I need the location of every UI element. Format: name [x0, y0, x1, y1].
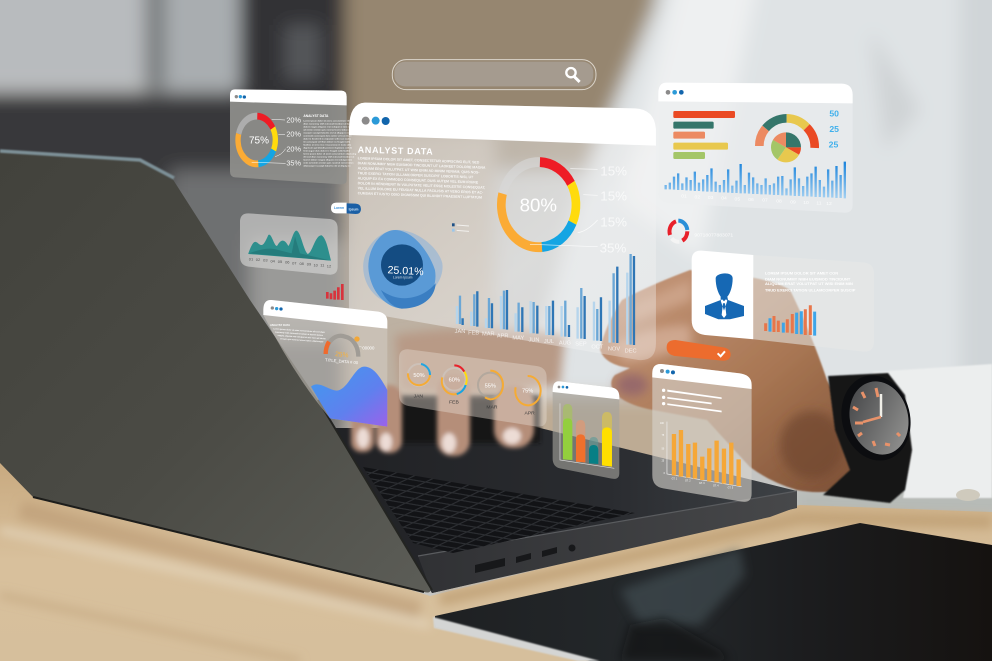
gauge apr: APR: [525, 410, 535, 416]
bar chart: 12: [826, 201, 832, 207]
heading: analyst data: ANALYST DATA: [358, 145, 434, 157]
text block: lorem ipsum: [358, 156, 486, 200]
bar chart: 08: [776, 199, 782, 205]
bar chart monthly: JUN: [528, 338, 539, 344]
panel header: [553, 381, 619, 399]
text block: diam nonummy nibh euismod tincidunt ut laoreet: [303, 122, 354, 125]
text block: ullamcorper suscipit lobortis nisl ut aliquip ex: [303, 164, 351, 167]
bar chart: 07: [762, 198, 768, 204]
axis labels: 09: [307, 262, 312, 267]
text block: lorem ipsum: ALIQUIP EX EA COMMODO CONSEQUAT. DUIS AUTEM VEL EUM IRIURE: [358, 176, 479, 185]
area chart: [248, 231, 331, 261]
text lines: ALIQUAM ERAT VOLUTPAT UT WISI ENIM MIN: [765, 281, 853, 286]
axis labels: 10: [313, 262, 319, 267]
legend: [452, 223, 469, 232]
text block: lorem ipsum: VEL ILLUM DOLORE EU FEUGIAT NULLA FACILISIS AT VERO EROS ET AC-: [358, 186, 484, 195]
panel header: [652, 364, 752, 389]
text block: Lorem ipsum dolor sit amet, consectetuer elit sed: [303, 119, 355, 122]
typing fingers: [351, 375, 534, 456]
bar chart: GT. 1: [672, 478, 678, 480]
gauge 25%: 00000: [362, 345, 375, 350]
blob chart 25.01%: 25.01%: [387, 264, 424, 278]
text block: enim ad minim veniam quis nostrud exerci tation: [303, 161, 354, 164]
gauge feb: 60%: [449, 378, 460, 384]
text block: Lorem ipsum dolor sit amet consectetuer elit sed diam: [273, 327, 325, 334]
bar chart: 02: [695, 194, 700, 200]
donut chart 75%: 35%: [286, 159, 301, 168]
bar chart: 10: [803, 200, 809, 206]
axis labels: 12: [327, 263, 332, 268]
pill bars: [560, 403, 614, 468]
panel: analyst data main: [349, 103, 656, 360]
text block: laoreet dolore magna aliquam erat volutpat wisi: [303, 158, 352, 161]
wristwatch: [823, 368, 919, 503]
icon: magnifier: [566, 68, 580, 82]
donut chart 80%: 80%: [520, 195, 557, 216]
bar chart: 09: [790, 199, 796, 205]
text block: lorem ipsum dolor sit amet consectetuer adipiscing: [303, 152, 357, 155]
gauge 25%: 25%: [335, 351, 349, 359]
gauge jan: 50%: [413, 373, 425, 379]
donut chart 75%: 75%: [249, 135, 269, 146]
axis labels: [249, 256, 332, 268]
bar chart: GT. 3: [699, 483, 705, 485]
axis labels: 03: [263, 258, 268, 263]
bar chart: 75: [662, 435, 665, 437]
donut chart 75%: 20%: [286, 115, 301, 124]
text block: [270, 323, 326, 343]
axis labels: 04: [270, 258, 276, 263]
bar chart: 03: [708, 195, 714, 201]
orange status button: [667, 340, 731, 361]
panel header: [658, 83, 853, 103]
text lines: [765, 270, 856, 292]
panel: orange bar chart: [652, 364, 752, 502]
text block: lorem ipsum: DIAM NONUMMY NIBH EUISMOD TINCIDUNT UT LAOREET DOLORE MAGNA: [358, 161, 486, 170]
axis labels: 01: [249, 256, 254, 261]
semicircle gauge: [759, 118, 815, 148]
axis labels: 02: [256, 257, 261, 262]
bar chart: 100: [660, 423, 665, 425]
bar chart monthly: OCT: [591, 344, 604, 350]
bar chart: GT. 5: [728, 488, 734, 490]
value labels: [829, 108, 839, 149]
gauge apr: 75%: [522, 389, 533, 395]
text block: ANALYST DATA: [303, 114, 329, 118]
mixed bar chart: [766, 305, 815, 336]
hand and fingers: [600, 270, 863, 492]
value labels: 25: [829, 139, 838, 149]
icon: businessman: [705, 273, 744, 319]
text block: lorem ipsum: DOLOR IN HENDRERIT IN VULPUTATE VELIT ESSE MOLESTIE CONSEQUAT,: [358, 181, 486, 190]
text lines: DIAM NONUMMY NIBH EUISMOD TINCIDUNT: [765, 276, 851, 281]
donut chart 75%: 20%: [286, 130, 301, 139]
wave area chart: [311, 367, 387, 427]
text block: dolor in hendrerit in vulputate velit esse moles: [303, 137, 352, 140]
text block: ANALYST DATA: [270, 323, 290, 327]
white profile tile: [692, 251, 753, 339]
text block: commodo consequat duis autem vel eum iriure: [303, 134, 352, 137]
text block: tie consequat vel illum dolore eu feugiat nulla: [303, 140, 351, 143]
bar chart: 11: [816, 200, 822, 206]
text lines: TRUD EXERCI TATION ULLAMCORPER SUSCIP: [765, 287, 856, 292]
panel: gauge and wave: [263, 300, 387, 427]
toggle pill: Ipsum: [349, 207, 358, 211]
small donut and number: 90718077883071: [694, 233, 733, 239]
blob chart 25.01%: [363, 230, 443, 309]
text block: lorem ipsum: ALIQUAM ERAT VOLUTPAT. UT WISI ENIM AD MINIM VENIAM, QUIS NOS-: [358, 166, 480, 175]
bar chart monthly: JUL: [544, 339, 554, 345]
bar chart: 05: [735, 196, 740, 202]
text block: elit sed diam nonummy nibh euismod tincidunt ut: [303, 155, 355, 158]
text block: veniam quis nostrud exerci tation ullamcorper: [280, 337, 324, 343]
text block: lorem ipsum: CUMSAN ET IUSTO ODIO DIGNISSIM QUI BLANDIT PRAESENT LUPTATUM: [358, 191, 482, 200]
donut chart 80%: 15%: [600, 189, 627, 204]
donut chart 80%: 35%: [600, 240, 626, 255]
bar chart monthly: AUG: [559, 340, 571, 346]
small donut and number: [669, 221, 733, 242]
text block: dolore magna aliquam erat volutpat ut wisi enim: [303, 125, 353, 128]
bar chart monthly: FEB: [468, 330, 479, 336]
text block: facilisis at vero eros et accumsan et iusto odio: [303, 143, 352, 146]
bar chart: 0: [664, 473, 666, 475]
table surface: [0, 460, 992, 661]
bar chart monthly: DEC: [625, 349, 637, 355]
gauge mar: MAR: [486, 404, 498, 410]
bar chart monthly: SEP: [575, 341, 587, 347]
gauge mar: [478, 371, 503, 410]
panel header: [263, 300, 387, 329]
text block: lorem ipsum: LOREM IPSUM DOLOR SIT AMET, CONSECTETUR ADIPISCING ELIT, SED: [358, 156, 480, 165]
bar chart: 04: [721, 196, 727, 202]
axis labels: 06: [285, 260, 290, 265]
bar chart: GT. 4: [713, 485, 719, 487]
keyboard: [363, 467, 635, 553]
laptop base: [325, 395, 797, 593]
value labels: 25: [829, 124, 839, 134]
gauge mar: 55%: [485, 383, 496, 389]
horizontal bars: [673, 111, 735, 159]
donut chart 80%: [488, 147, 627, 263]
gauge 25%: TITLE_DATA # 00: [325, 357, 359, 365]
toggle pill: [331, 203, 361, 214]
axis labels: 08: [299, 261, 305, 266]
panel: pill bar chart: [553, 381, 619, 479]
gauge jan: [408, 364, 430, 400]
gauge feb: [442, 365, 467, 405]
bar chart: GT. 2: [685, 481, 691, 483]
donut chart 80%: 15%: [600, 215, 627, 230]
search bar: [392, 60, 596, 90]
pie chart: [776, 137, 796, 158]
bar chart: 50: [662, 448, 665, 450]
panel: mixed charts: [658, 83, 853, 213]
laptop lid: [0, 150, 432, 592]
panel: monthly gauges: [399, 349, 547, 427]
blob chart 25.01%: Lorem Ipsum: [393, 276, 413, 280]
text block: mcorper suscipit lobortis nisl ut aliquip ex ea: [303, 131, 350, 134]
panel: teal area chart: [240, 213, 338, 275]
panel: small analyst data: [230, 89, 357, 184]
back of typing hand: [395, 328, 565, 393]
text block: lorem ipsum: TRUD EXERCI TATION ULLAMCORPER SUSCIPIT LOBORTIS NISL UT: [358, 171, 474, 179]
gauge jan: JAN: [414, 394, 423, 400]
wood grain: [0, 510, 992, 661]
shirt sleeve: [872, 364, 992, 501]
list lines: [662, 389, 722, 412]
text block: [303, 114, 357, 167]
text block: magna aliquam erat volutpat ut wisi enim ad minim: [278, 334, 326, 340]
donut chart 80%: 15%: [600, 164, 627, 179]
text block: ad minim veniam quis nostrud exerci tation ulla: [303, 128, 353, 131]
bar chart: 06: [748, 197, 754, 203]
laptop ports: [475, 544, 576, 573]
gauge feb: FEB: [449, 399, 459, 405]
panel: profile card: [692, 251, 874, 352]
panel header: [349, 103, 656, 146]
panel header: [230, 89, 347, 105]
bar chart monthly: NOV: [608, 347, 620, 353]
tablet: [433, 523, 992, 661]
bar chart monthly: MAY: [512, 336, 524, 342]
bar chart: [660, 422, 742, 490]
bar chart monthly: APR: [497, 334, 508, 340]
text lines: LOREM IPSUM DOLOR SIT AMET CON: [765, 270, 838, 275]
text block: dignissim qui blandit praesent luptatum zzril de: [303, 146, 353, 149]
text block: lenit augue duis dolore te feugait nulla facilisi: [303, 149, 350, 152]
icon: small red bar chart: [326, 284, 344, 300]
gauge 25%: [325, 336, 375, 365]
value labels: 50: [829, 108, 839, 118]
axis labels: 11: [320, 263, 325, 268]
bar chart: [666, 162, 845, 207]
bar chart: 01: [681, 194, 687, 200]
axis labels: 07: [292, 260, 297, 265]
text block: nonummy nibh euismod tincidunt ut laoreet dolore: [275, 331, 324, 337]
gauge apr: [515, 376, 541, 416]
donut chart 75%: 20%: [286, 144, 301, 153]
bar chart monthly: JAN: [455, 329, 465, 335]
bar chart monthly: MAR: [482, 332, 495, 338]
toggle pill: Lorem: [334, 206, 344, 210]
axis labels: 05: [278, 259, 283, 264]
donut chart 75%: [231, 107, 301, 173]
icon: check: [718, 351, 725, 356]
bar chart monthly: [455, 254, 637, 355]
bar chart: 25: [662, 461, 665, 463]
